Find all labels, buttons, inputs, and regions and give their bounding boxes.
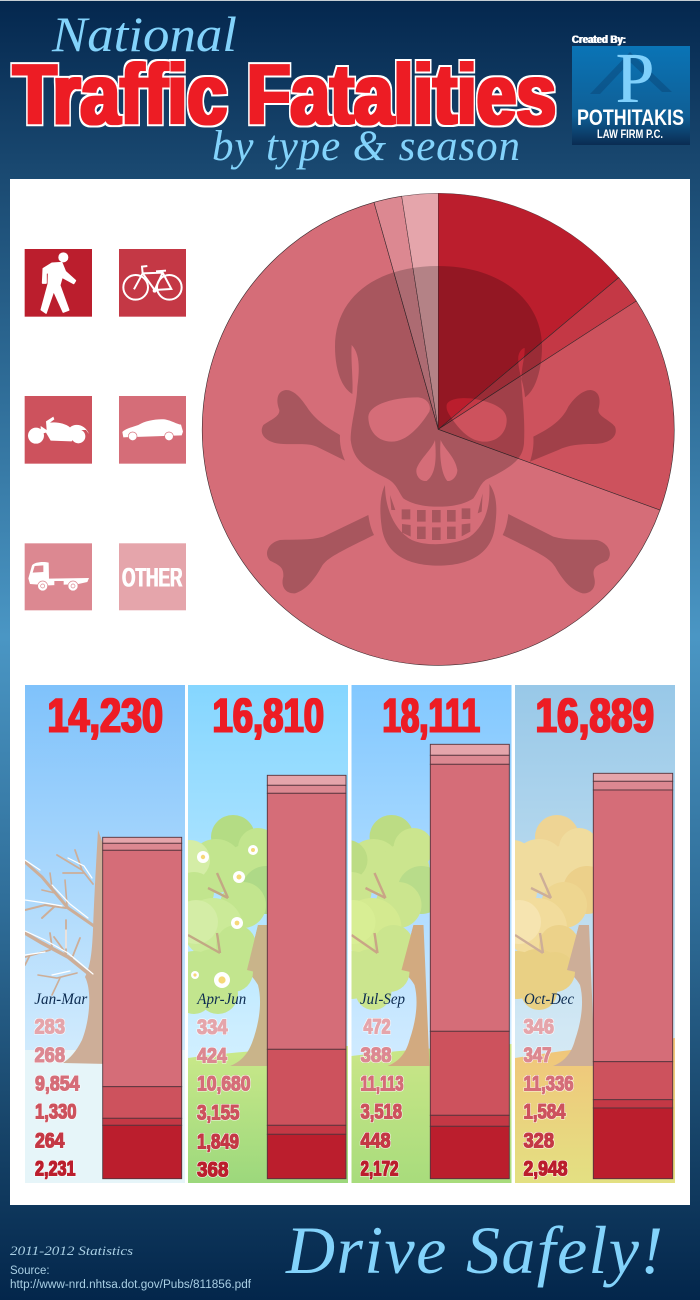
autumn bar stack <box>593 773 673 1179</box>
icon: pedestrian <box>25 249 92 317</box>
winter values: 1,330 <box>35 1101 76 1124</box>
summer ground <box>352 1044 512 1183</box>
winter bar stack <box>103 837 182 1179</box>
spring ground <box>188 1046 348 1183</box>
icon: bicycle <box>119 249 186 317</box>
bone: lower left <box>267 515 374 593</box>
created by label: Created By: <box>572 34 626 46</box>
winter values <box>34 1015 80 1181</box>
spring values <box>197 1016 250 1182</box>
legend icons <box>25 249 186 610</box>
spring sky background <box>188 685 348 1183</box>
footer source <box>10 1265 252 1291</box>
autumn values: 11,336 <box>524 1072 574 1095</box>
spring total: 16,810 <box>212 689 324 743</box>
logo firm subtitle: LAW FIRM P.C. <box>597 129 663 141</box>
autumn values: 1,584 <box>524 1101 566 1124</box>
winter values: 264 <box>35 1129 65 1152</box>
season panel: Apr-Jun <box>188 685 348 1183</box>
autumn total: 16,889 <box>536 689 654 743</box>
pie chart <box>202 193 674 665</box>
season panel: Oct-Dec <box>515 685 675 1183</box>
autumn sky background <box>515 685 675 1183</box>
closing message: Drive Safely! <box>285 1212 663 1288</box>
autumn values: 346 <box>524 1015 554 1038</box>
skull and crossbones <box>262 266 616 593</box>
slice: car occupants <box>202 202 660 665</box>
winter label: Jan-Mar <box>34 991 88 1008</box>
winter values: 268 <box>34 1044 65 1067</box>
footer statistics note: 2011-2012 Statistics <box>10 1243 133 1258</box>
title line: Traffic Fatalities: Traffic Fatalities <box>13 48 556 142</box>
autumn tree <box>515 815 593 1066</box>
footer source: http://www-nrd.nhtsa.dot.gov/Pubs/811856.pdf <box>10 1279 252 1291</box>
summer values: 448 <box>360 1129 391 1152</box>
bone: lower right <box>503 514 610 593</box>
summer values: 2,172 <box>360 1158 398 1181</box>
slice: motorcycle <box>438 301 674 510</box>
logo letter P: P <box>616 38 654 118</box>
logo tile <box>572 46 690 145</box>
slice: truck <box>374 196 438 429</box>
slice: pedestrian <box>438 193 619 429</box>
autumn values: 2,948 <box>524 1158 568 1181</box>
spring tree <box>188 815 267 1066</box>
autumn label: Oct-Dec <box>524 991 574 1008</box>
title line: National: National <box>51 6 237 62</box>
autumn values <box>524 1015 574 1181</box>
spring values: 334 <box>197 1016 228 1039</box>
summer sky background <box>352 685 512 1183</box>
slice: other <box>402 193 438 429</box>
summer values: 3,518 <box>360 1101 402 1124</box>
title line: by type and season: by type & season <box>212 123 520 170</box>
winter values: 2,231 <box>35 1158 76 1181</box>
summer values <box>360 1015 404 1181</box>
winter total: 14,230 <box>48 689 163 743</box>
autumn values: 328 <box>524 1129 554 1152</box>
bone: upper right <box>530 390 616 462</box>
skull cranium <box>335 266 542 507</box>
bone: upper left <box>262 390 345 461</box>
bare winter tree <box>25 830 108 1064</box>
created by logo <box>572 34 690 145</box>
summer values: 11,113 <box>360 1072 404 1095</box>
spring values: 10,680 <box>197 1073 250 1096</box>
spring bar stack <box>267 775 346 1179</box>
icon: motorcycle <box>25 396 92 464</box>
summer tree <box>352 815 430 1066</box>
spring values: 424 <box>197 1044 227 1067</box>
main white panel <box>10 179 690 1205</box>
footer source: Source: <box>10 1265 50 1277</box>
title <box>13 6 556 170</box>
icon: other: OTHER <box>122 562 182 592</box>
spring values: 1,849 <box>197 1130 239 1153</box>
summer label: Jul-Sep <box>360 991 405 1008</box>
season panel: Jul-Sep <box>352 685 512 1183</box>
spring values: 368 <box>197 1159 229 1182</box>
icon: other <box>119 543 186 610</box>
winter values: 283 <box>34 1015 65 1038</box>
autumn values: 347 <box>524 1044 552 1067</box>
icon: flatbed truck <box>25 543 92 610</box>
summer total: 18,111 <box>382 689 480 743</box>
summer bar stack <box>430 744 509 1179</box>
season panel: Jan-Mar <box>25 685 185 1183</box>
icon: car <box>119 396 186 464</box>
spring values: 3,155 <box>197 1101 240 1124</box>
spring label: Apr-Jun <box>196 991 246 1008</box>
winter values: 9,854 <box>35 1072 80 1095</box>
summer values: 388 <box>360 1044 392 1067</box>
winter sky and snow background <box>25 685 185 1183</box>
autumn ground <box>515 1038 675 1183</box>
slice: bicycle <box>438 278 636 429</box>
summer values: 472 <box>364 1015 390 1038</box>
skull jaw and teeth <box>380 484 496 566</box>
